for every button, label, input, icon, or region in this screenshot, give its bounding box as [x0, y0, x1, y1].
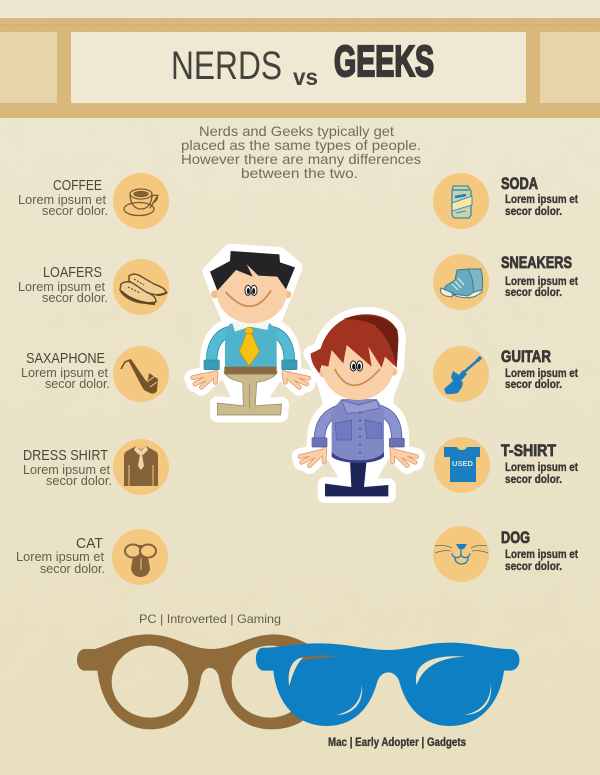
item: saxaphone: secor dolor. — [45, 376, 110, 391]
intro text: Nerds and Geeks typically get — [199, 123, 394, 139]
nerd head — [211, 261, 291, 323]
item: coffee: COFFEE — [53, 177, 102, 194]
intro text: between the two. — [241, 165, 358, 181]
icon: coffee cup — [124, 189, 158, 216]
intro text: placed as the same types of people. — [181, 137, 421, 153]
icon: saxophone — [121, 359, 158, 394]
icon: sneakers — [440, 269, 483, 298]
nerd trousers — [217, 372, 282, 415]
item: soda: Lorem ipsum et — [505, 194, 578, 206]
item: t-shirt — [434, 437, 578, 493]
geek shirt — [312, 399, 404, 463]
item: dress shirt: secor dolor. — [46, 473, 112, 488]
icon: used t-shirt: USED — [452, 461, 473, 468]
icon: guitar — [444, 357, 481, 394]
character: geek — [300, 314, 417, 496]
icon: loafers — [120, 274, 167, 304]
item: loafers: LOAFERS — [43, 264, 102, 281]
item: dress shirt: Lorem ipsum et — [23, 462, 110, 477]
icon: blue geek sunglasses — [256, 643, 519, 726]
item: t-shirt: Lorem ipsum et — [505, 462, 578, 474]
intro text: However there are many differences — [181, 151, 421, 167]
item: guitar — [433, 346, 578, 402]
item: cat: Lorem ipsum et — [16, 549, 104, 564]
icon: cat face — [125, 544, 156, 577]
nerd hair — [210, 251, 295, 291]
nerd tie — [239, 327, 259, 366]
nerd shirt — [204, 321, 297, 374]
header banner — [0, 18, 600, 118]
item: cat: CAT — [76, 535, 103, 552]
sneakers label — [501, 254, 578, 299]
item: loafers: secor dolor. — [42, 290, 108, 305]
geek hair — [311, 314, 398, 373]
sneakers label: Lorem ipsum et — [505, 276, 578, 288]
item: loafers — [18, 259, 169, 315]
item: guitar: GUITAR — [501, 348, 551, 366]
title: vs — [293, 64, 318, 90]
item: soda: secor dolor. — [505, 206, 562, 218]
sneakers label: secor dolor. — [505, 287, 562, 299]
label: geek glasses text: Mac | Early Adopter | Gadgets — [328, 737, 466, 749]
item: t-shirt: secor dolor. — [505, 474, 562, 486]
item: t-shirt: T-SHIRT — [501, 442, 556, 460]
icon: brown nerd glasses — [77, 634, 313, 729]
title: GEEKS — [334, 37, 434, 86]
item: coffee: Lorem ipsum et — [18, 192, 106, 207]
geek hands — [300, 449, 417, 466]
geek head — [319, 333, 397, 400]
item: loafers: Lorem ipsum et — [18, 279, 105, 294]
icon: dog face — [435, 544, 488, 564]
nerd hands — [193, 372, 309, 387]
item: dog: Lorem ipsum et — [505, 549, 578, 561]
item: saxaphone: SAXAPHONE — [26, 350, 105, 367]
item: dress shirt — [23, 439, 169, 495]
title: NERDS — [171, 44, 282, 88]
icon: soda can — [452, 186, 472, 218]
item: soda — [433, 173, 578, 229]
item: guitar: Lorem ipsum et — [505, 368, 578, 380]
item: cat: secor dolor. — [40, 561, 105, 576]
item: guitar: secor dolor. — [505, 379, 562, 391]
item: dress shirt: DRESS SHIRT — [23, 447, 108, 464]
item: dog: DOG — [501, 529, 530, 547]
sneakers label: SNEAKERS — [501, 254, 572, 272]
item: dog — [433, 526, 578, 582]
item: soda: SODA — [501, 175, 538, 193]
item: saxaphone — [21, 346, 169, 402]
title — [171, 37, 434, 90]
intro text — [181, 123, 421, 181]
item: saxaphone: Lorem ipsum et — [21, 365, 108, 380]
item: coffee — [18, 173, 169, 229]
icon: used t-shirt — [444, 447, 480, 482]
icon: dress shirt — [124, 446, 158, 486]
item: sneakers — [433, 254, 489, 310]
item: cat — [16, 529, 168, 585]
label: nerd glasses text: PC | Introverted | Gaming — [139, 612, 281, 626]
character: nerd — [193, 251, 309, 415]
geek trousers — [325, 460, 388, 496]
item: dog: secor dolor. — [505, 561, 562, 573]
item: coffee: secor dolor. — [42, 203, 108, 218]
